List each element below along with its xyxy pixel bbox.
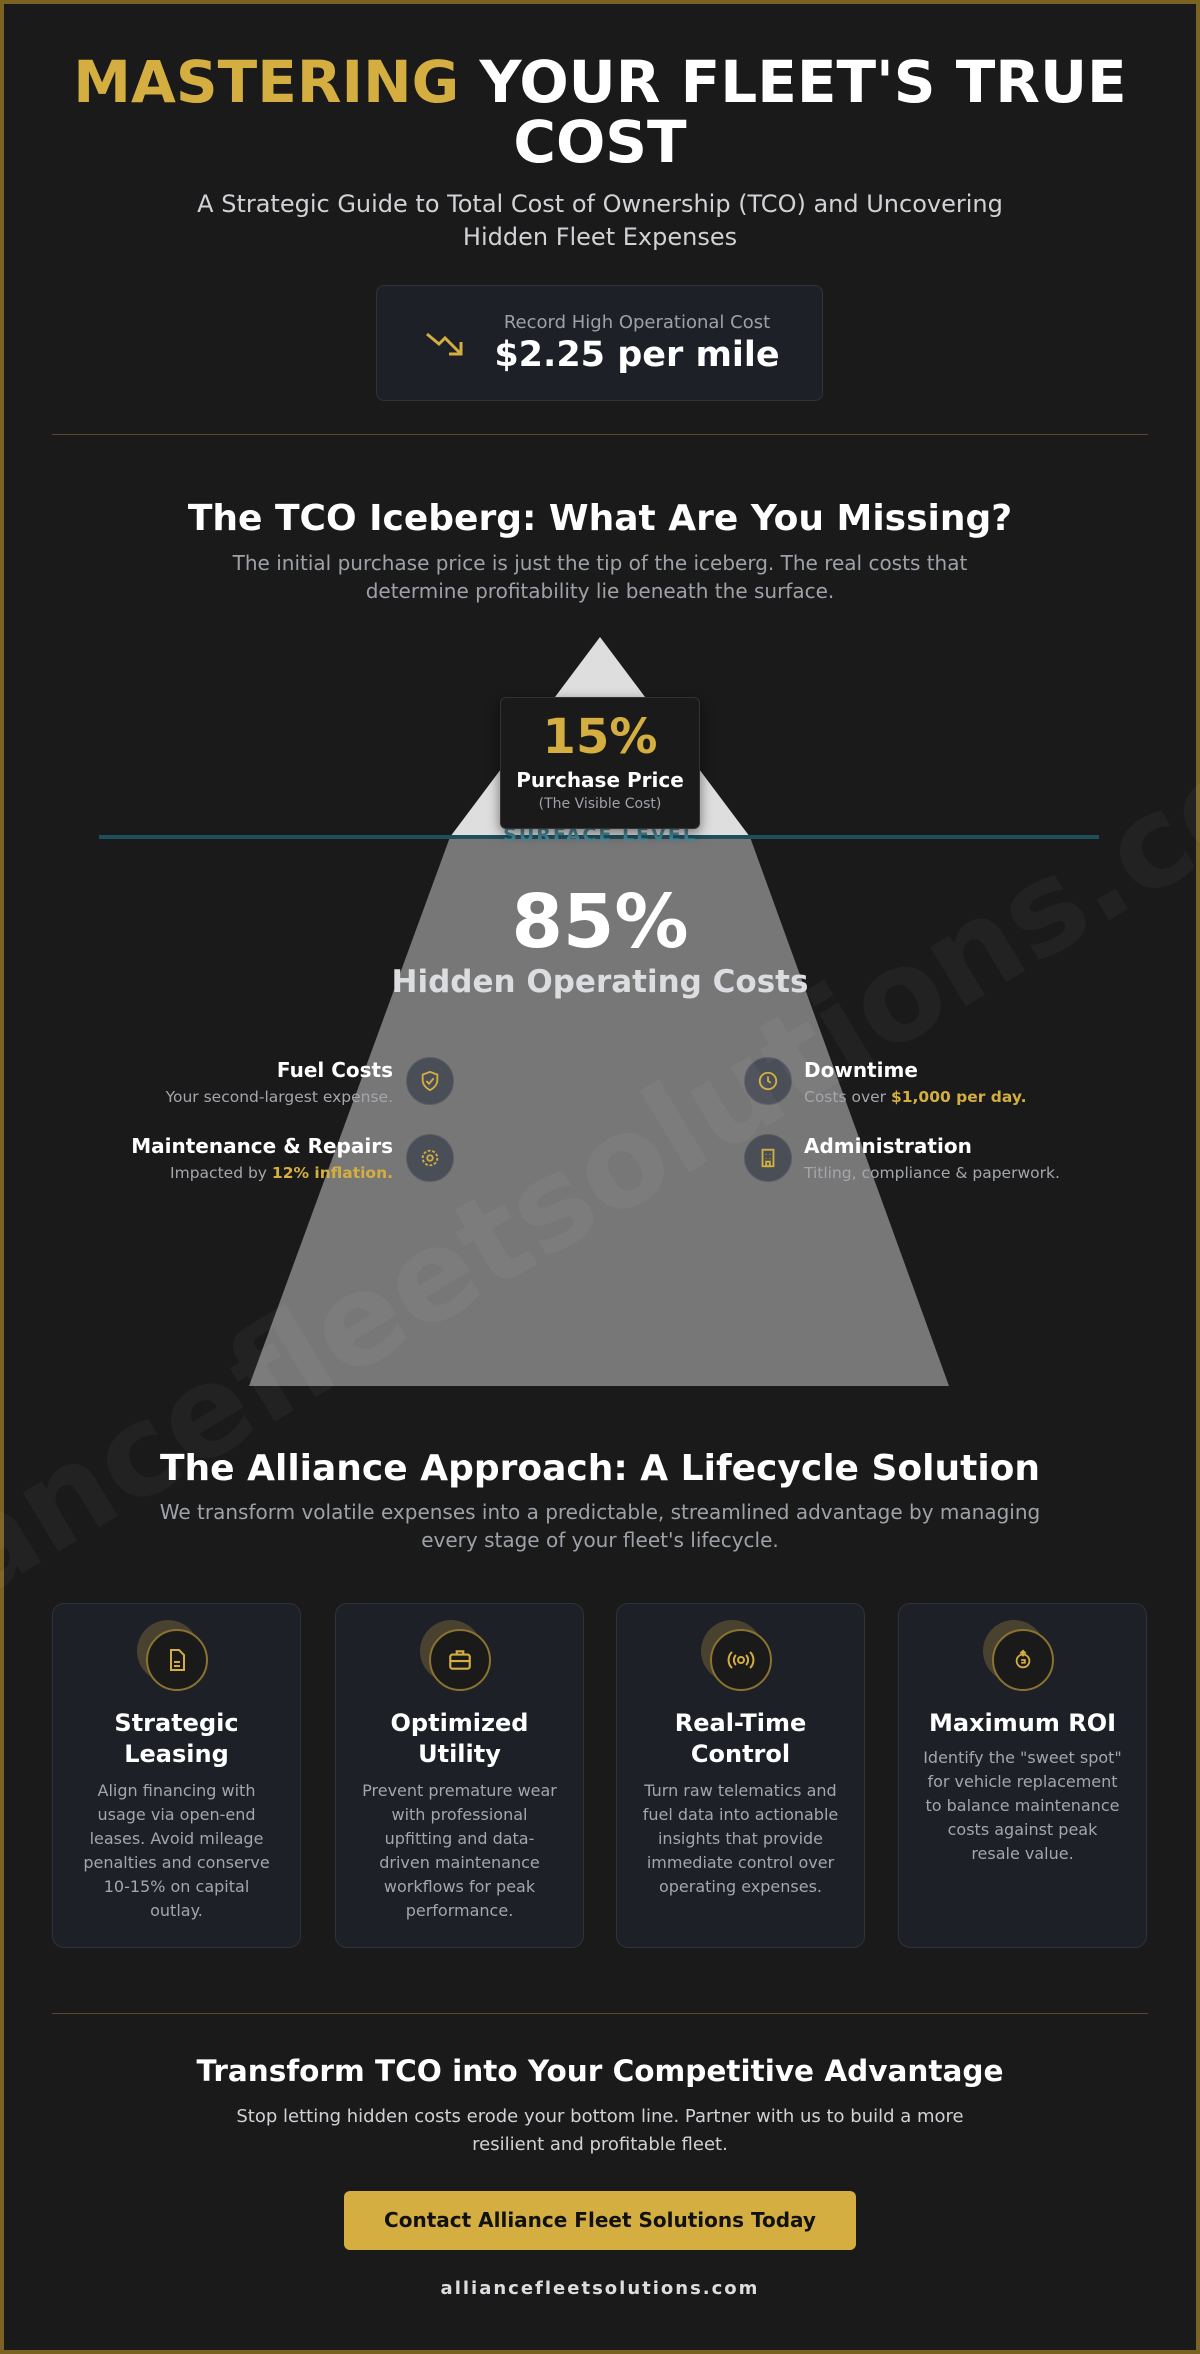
card: optimized utility (335, 1603, 584, 1948)
card: maximum roi: resale value. (971, 1844, 1074, 1863)
alliance subtitle: every stage of your fleet's lifecycle. (421, 1528, 779, 1552)
cta text: resilient and profitable fleet. (472, 2134, 728, 2155)
item: administration: Titling, compliance & paperwork. (804, 1164, 1060, 1182)
alliance subtitle: We transform volatile expenses into a predictable, streamlined advantage by managing (160, 1500, 1040, 1524)
card: real-time control: Control (691, 1740, 790, 1768)
stat text: Record High Operational Cost (504, 312, 770, 333)
card: optimized utility: Prevent premature wear (362, 1781, 557, 1800)
card: strategic leasing: usage via open-end (97, 1805, 256, 1824)
footer url: alliancefleetsolutions.com (441, 2278, 759, 2299)
cta button: Contact Alliance Fleet Solutions Today (384, 2208, 816, 2232)
item: maintenance: Maintenance & Repairs (131, 1134, 393, 1158)
cta heading: Transform TCO into Your Competitive Advantage (196, 2054, 1004, 2088)
card: optimized utility: Optimized (391, 1709, 528, 1737)
stat text: $2.25 per mile (494, 335, 780, 375)
card: optimized utility: with professional (392, 1805, 527, 1824)
iceberg chart: SURFACE LEVEL (503, 824, 697, 846)
card: 15% purchase price: (The Visible Cost) (539, 796, 661, 812)
item: downtime (804, 1058, 1026, 1106)
item: fuel costs (166, 1058, 393, 1106)
item: maintenance: Impacted by 12% inflation. (170, 1164, 393, 1182)
card: optimized utility: workflows for peak (384, 1877, 535, 1896)
item: administration: Administration (804, 1134, 972, 1158)
subtitle: Hidden Fleet Expenses (463, 223, 737, 251)
icon: coin (992, 1629, 1054, 1691)
icon: building (744, 1134, 792, 1182)
title: MASTERING YOUR FLEET'S TRUE (73, 48, 1127, 116)
card: strategic leasing: Strategic (114, 1709, 239, 1737)
stat text (494, 312, 780, 375)
card: maximum roi: to balance maintenance (925, 1796, 1120, 1815)
icon: shield (406, 1057, 454, 1105)
card: strategic leasing: outlay. (150, 1901, 203, 1920)
card: 15% purchase price (500, 697, 700, 829)
card: optimized utility: upfitting and data- (385, 1829, 534, 1848)
iceberg subtitle: determine profitability lie beneath the surface. (366, 579, 834, 603)
card: strategic leasing: Align financing with (98, 1781, 255, 1800)
card: strategic leasing (52, 1603, 301, 1948)
item: downtime: Downtime (804, 1058, 918, 1082)
card: strategic leasing: 10-15% on capital (104, 1877, 249, 1896)
card: 15% purchase price: Purchase Price (516, 768, 684, 792)
subtitle (197, 190, 1003, 251)
card: real-time control: operating expenses. (659, 1877, 822, 1896)
subtitle: A Strategic Guide to Total Cost of Ownership (TCO) and Uncovering (197, 190, 1003, 218)
85% hidden costs: 85% (511, 879, 689, 965)
iceberg subtitle (232, 551, 967, 603)
icon: gear (406, 1134, 454, 1182)
iceberg chart (99, 637, 1099, 1386)
card: real-time control (616, 1603, 865, 1948)
iceberg heading: The TCO Iceberg: What Are You Missing? (188, 498, 1012, 539)
85% hidden costs (392, 879, 808, 1000)
item: administration (804, 1134, 1060, 1182)
alliance heading: The Alliance Approach: A Lifecycle Solution (160, 1448, 1040, 1489)
card: optimized utility: performance. (406, 1901, 513, 1920)
card: maximum roi: costs against peak (948, 1820, 1097, 1839)
card: maximum roi (898, 1603, 1147, 1948)
card: real-time control: Turn raw telematics and (644, 1781, 837, 1800)
cta text: Stop letting hidden costs erode your bottom line. Partner with us to build a more (236, 2106, 964, 2127)
85% hidden costs: Hidden Operating Costs (392, 964, 808, 1000)
card: maximum roi: Identify the "sweet spot" (923, 1748, 1122, 1767)
card: real-time control: insights that provide (658, 1829, 823, 1848)
icon: trend down (426, 332, 462, 356)
title (73, 48, 1127, 176)
card: maximum roi: for vehicle replacement (927, 1772, 1118, 1791)
card: strategic leasing: Leasing (124, 1740, 229, 1768)
icon: clock (744, 1057, 792, 1105)
icon: briefcase (429, 1629, 491, 1691)
card: maximum roi: Maximum ROI (929, 1709, 1116, 1737)
item: downtime: Costs over $1,000 per day. (804, 1088, 1026, 1106)
card: 15% purchase price: 15% (543, 709, 657, 765)
item: fuel costs: Your second-largest expense. (166, 1088, 393, 1106)
cta text (236, 2106, 964, 2155)
cta button (344, 2191, 856, 2250)
card: strategic leasing: leases. Avoid mileage (90, 1829, 263, 1848)
card: optimized utility: Utility (418, 1740, 501, 1768)
card: strategic leasing: penalties and conserve (83, 1853, 270, 1872)
icon: document (146, 1629, 208, 1691)
card: real-time control: Real-Time (675, 1709, 806, 1737)
item: fuel costs: Fuel Costs (277, 1058, 393, 1082)
card: real-time control: immediate control over (647, 1853, 834, 1872)
card: real-time control: fuel data into actionable (643, 1805, 838, 1824)
card: optimized utility: driven maintenance (379, 1853, 540, 1872)
item: maintenance (131, 1134, 393, 1182)
title: COST (513, 108, 687, 176)
alliance subtitle (160, 1500, 1040, 1552)
icon: signal (710, 1629, 772, 1691)
iceberg subtitle: The initial purchase price is just the tip of the iceberg. The real costs that (233, 551, 967, 575)
stat box (376, 285, 823, 401)
